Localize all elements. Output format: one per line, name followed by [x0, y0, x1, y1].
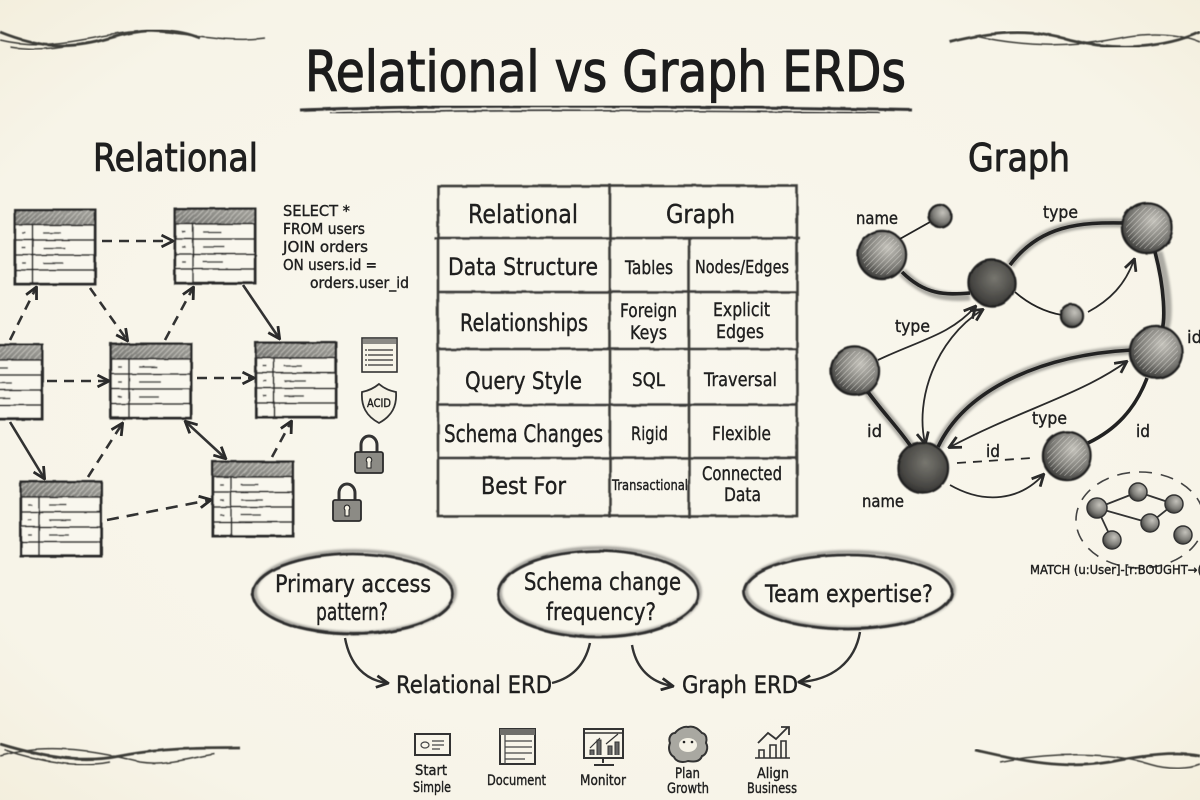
- practice: plan growth: Plan: [675, 766, 700, 782]
- table cells: Rigid: [631, 423, 668, 445]
- practice: start simple: Simple: [413, 780, 451, 796]
- mini graph icon: [1076, 472, 1200, 568]
- graph labels: type: [895, 317, 930, 337]
- icon: ACID shield: [362, 384, 396, 423]
- decision: schema change frequency: frequency?: [546, 598, 656, 626]
- graph labels: type: [1043, 203, 1078, 223]
- table nodes: [0, 209, 336, 556]
- decision arrows: [345, 632, 860, 686]
- decision: primary access pattern: Primary access: [275, 570, 431, 598]
- table header row: Graph: [666, 200, 735, 230]
- table cells: Connected: [702, 463, 782, 485]
- graph node hatching: [835, 207, 1178, 476]
- decision: team expertise: [744, 552, 954, 629]
- decision: team expertise: Team expertise?: [764, 580, 933, 608]
- practice: document: Document: [487, 773, 546, 789]
- SQL snippet: FROM users: [283, 220, 365, 238]
- SQL snippet: orders.user_id: [310, 274, 409, 293]
- table row labels: [444, 253, 603, 500]
- title underline: [300, 106, 912, 113]
- practice: align business: Business: [747, 781, 797, 797]
- table cells: Explicit: [713, 299, 770, 321]
- table row labels: Schema Changes: [444, 420, 603, 448]
- title: Relational vs Graph ERDs: [305, 40, 906, 105]
- graph labels: id: [1136, 422, 1150, 442]
- panel: graph diagram: [831, 203, 1200, 512]
- table header row: [468, 200, 735, 230]
- heading: relational: Relational: [93, 136, 258, 180]
- decision: primary access pattern: pattern?: [316, 598, 388, 626]
- outcome: graph ERD: Graph ERD: [682, 671, 798, 699]
- SQL snippet: JOIN orders: [282, 238, 368, 256]
- decision: schema change frequency: Schema change: [524, 568, 681, 596]
- table row labels: Relationships: [460, 309, 588, 337]
- graph edges: arrows: [878, 260, 1134, 497]
- table cells: Traversal: [703, 369, 777, 391]
- practice: monitor: Monitor: [580, 773, 626, 789]
- table cells: SQL: [632, 369, 665, 391]
- relationship arrows: [10, 241, 291, 520]
- table cells: Data: [724, 484, 761, 506]
- decorative corner scribble: bottom right: [975, 750, 1200, 768]
- table cells: Edges: [716, 321, 764, 343]
- table cells: Transactional: [611, 478, 688, 494]
- graph edges: solid: [868, 222, 1164, 448]
- outcome: relational ERD: Relational ERD: [396, 671, 552, 699]
- practice: monitor: [580, 729, 626, 789]
- practice: plan growth: Growth: [667, 781, 709, 797]
- practice: plan growth: [667, 727, 709, 797]
- table cells: Keys: [630, 322, 667, 344]
- icon: padlock one: [355, 436, 383, 473]
- practice: start simple: Start: [415, 763, 447, 779]
- practice: document: [487, 729, 546, 789]
- graph labels: name: [856, 209, 898, 229]
- table grid: [434, 184, 800, 518]
- table row labels: Best For: [481, 472, 566, 500]
- practice: start simple: [413, 734, 451, 796]
- panel: comparison table: [434, 184, 800, 518]
- icon: padlock two: [333, 484, 361, 521]
- SQL snippet: SELECT *: [283, 202, 350, 220]
- decorative corner scribble: top right: [950, 32, 1200, 47]
- table row labels: Data Structure: [448, 253, 598, 281]
- practice: align business: Align: [757, 766, 789, 782]
- table cells: Tables: [624, 257, 673, 279]
- decision: primary access pattern: [253, 551, 455, 634]
- table cells: Flexible: [712, 423, 771, 445]
- SQL snippet: [282, 202, 409, 293]
- heading: graph: Graph: [968, 136, 1070, 180]
- icon: document table: [362, 338, 397, 372]
- table cells: Nodes/Edges: [695, 257, 789, 278]
- graph labels: [856, 203, 1200, 512]
- graph edges: smudge: [868, 223, 1167, 448]
- practice: align business: [747, 727, 797, 797]
- graph labels: type: [1032, 409, 1067, 429]
- SQL snippet: ON users.id =: [283, 256, 377, 274]
- decorative corner scribble: top left: [0, 30, 265, 49]
- graph nodes: [831, 203, 1182, 493]
- graph labels: name: [862, 492, 904, 512]
- panel: relational diagram: [0, 209, 336, 556]
- graph labels: id: [986, 442, 1000, 462]
- table cells: Foreign: [620, 300, 677, 322]
- table header row: Relational: [468, 200, 578, 230]
- decorative corner scribble: bottom left: [0, 744, 240, 764]
- graph labels: id: [867, 422, 882, 442]
- table row labels: Query Style: [465, 367, 582, 395]
- decision: schema change frequency: [498, 548, 700, 637]
- table cells: [611, 257, 789, 506]
- icon: ACID shield: ACID: [367, 396, 391, 410]
